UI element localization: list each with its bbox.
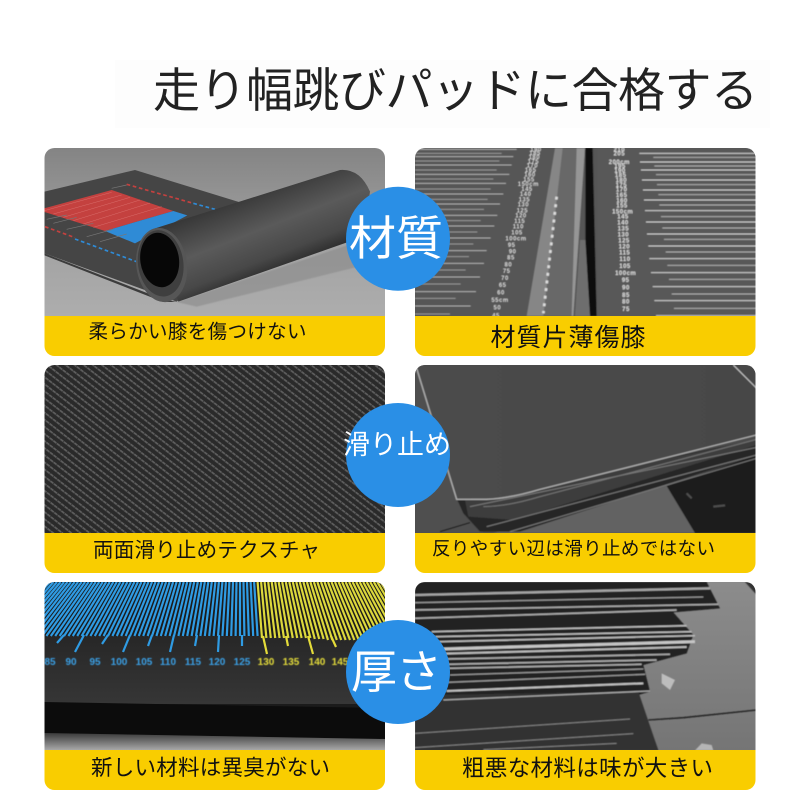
- blue scale lines: [44, 582, 259, 637]
- photo: printed ruler mat: 175: [616, 183, 627, 189]
- photo: printed ruler mat: 185: [529, 151, 541, 157]
- photo: printed ruler mat: 170: [527, 164, 538, 170]
- photo: printed ruler mat: 130: [618, 232, 629, 238]
- title: 走り幅跳びパッドに合格する: [153, 64, 758, 117]
- photo: printed ruler mat: 95: [508, 243, 516, 249]
- photo: printed ruler mat: 135: [519, 197, 530, 203]
- photo: printed ruler mat: 105: [619, 264, 631, 270]
- scale numbers: 105: [136, 657, 153, 668]
- photo: diagonal texture: [44, 365, 385, 533]
- photo: printed ruler mat: 170: [616, 188, 628, 194]
- photo: printed ruler mat: 115: [619, 251, 630, 257]
- photo: rough stacked sheets: [415, 582, 757, 750]
- badge: material: 材質: [349, 212, 443, 265]
- photo: printed ruler mat: 100cm: [615, 271, 636, 277]
- photo: printed ruler mat: 160: [616, 198, 628, 204]
- photo: printed ruler mat: 165: [525, 168, 537, 174]
- photo: printed ruler mat: 145: [617, 215, 629, 221]
- photo: printed ruler mat: 60: [497, 290, 505, 296]
- caption bar: [44, 750, 385, 790]
- badge: anti-slip: 滑り止め: [343, 430, 451, 460]
- photo: printed ruler mat: 190: [530, 147, 542, 153]
- panel: coarse material stack: [415, 582, 757, 790]
- caption: 粗悪な材料は味が大きい: [462, 756, 713, 781]
- photo: printed ruler mat: 190: [614, 168, 626, 174]
- caption bar: [44, 316, 385, 356]
- scale numbers: [44, 657, 348, 666]
- scale numbers: 120: [209, 657, 226, 668]
- photo: printed ruler mat: 120: [515, 214, 527, 220]
- panel: warped sheets without grip: [415, 365, 757, 573]
- photo: printed ruler mat: 180: [529, 155, 540, 161]
- photo: printed ruler mat: 75: [622, 307, 630, 313]
- badge: material: [346, 187, 450, 291]
- photo: printed ruler mat: 80: [622, 299, 630, 305]
- panel: new material, thickness close-up: [44, 582, 385, 790]
- scale numbers: 90: [65, 657, 77, 668]
- photo: printed ruler mat: 75: [503, 269, 511, 275]
- caption: 柔らかい膝を傷つけない: [88, 321, 306, 343]
- badge: thickness: [346, 620, 450, 724]
- photo: stacked thin sheets: [415, 365, 757, 533]
- photo: printed ruler mat: 80: [504, 262, 512, 268]
- photo: printed ruler mat: 100cm: [505, 237, 527, 243]
- photo: printed ruler mat: 105: [511, 231, 523, 237]
- scale numbers: 140: [309, 657, 326, 668]
- photo: printed ruler mat: 175: [528, 159, 539, 165]
- scale numbers: 115: [185, 657, 202, 668]
- photo: printed ruler mat: 85: [622, 293, 630, 299]
- photo: printed ruler mat: 200cm: [609, 160, 630, 166]
- caption bar: [44, 533, 385, 573]
- scale numbers: 130: [258, 657, 275, 668]
- caption: 両面滑り止めテクスチャ: [93, 539, 320, 562]
- scale numbers: 110: [160, 657, 177, 668]
- photo: printed ruler mat: 90: [622, 286, 630, 292]
- panel: double-sided anti-slip texture: [44, 365, 385, 573]
- caption: 材質片薄傷膝: [490, 324, 646, 352]
- title background: [115, 60, 770, 128]
- scale numbers: 135: [283, 657, 300, 668]
- photo: printed ruler mat: 95: [622, 278, 630, 284]
- photo: printed ruler mat: 110: [619, 257, 631, 263]
- photo: printed ruler mat: 210: [614, 147, 625, 153]
- caption bar: [415, 750, 756, 790]
- photo: printed ruler mat: 125: [517, 208, 528, 214]
- photo: printed ruler mat: 160: [524, 173, 536, 179]
- scale numbers: 145: [332, 657, 349, 668]
- photo: printed ruler mat: 150cm: [518, 182, 539, 188]
- photo: printed ruler mat: 50: [493, 306, 501, 312]
- photo: mat surface below scale: [44, 636, 385, 704]
- photo: printed ruler mat: 185: [615, 173, 627, 179]
- panel: thin material ruler mat: [415, 147, 757, 356]
- badge: thickness: 厚さ: [351, 646, 442, 698]
- caption: 新しい材料は異臭がない: [91, 756, 330, 780]
- photo: printed ruler mat: [415, 147, 757, 320]
- photo: printed ruler mat: 115: [514, 219, 525, 225]
- photo: printed ruler mat: 140: [617, 220, 629, 226]
- scale numbers: 100: [111, 657, 128, 668]
- scale numbers: 85: [44, 657, 56, 668]
- photo: printed ruler mat: 125: [618, 238, 630, 244]
- caption bar: [415, 533, 756, 573]
- photo: printed ruler mat: 45: [492, 314, 500, 320]
- photo: printed ruler mat: 150cm: [612, 209, 633, 215]
- scale numbers: 125: [234, 657, 251, 668]
- photo: printed ruler mat: 85: [507, 256, 515, 262]
- photo: printed ruler mat: 155: [616, 204, 628, 210]
- photo: printed ruler mat: 145: [521, 187, 533, 193]
- mat edge thickness: [44, 702, 385, 739]
- photo: printed ruler mat: 65: [499, 283, 507, 289]
- photo: printed ruler mat: 110: [513, 225, 524, 231]
- photo: printed ruler mat: 90: [509, 249, 517, 255]
- photo: printed ruler mat: 155: [523, 177, 535, 183]
- caption: 反りやすい辺は滑り止めではない: [432, 538, 715, 559]
- photo: printed ruler mat: 140: [520, 192, 532, 198]
- photo: printed ruler mat: 180: [616, 178, 627, 184]
- photo: printed ruler mat: 135: [618, 226, 629, 232]
- long ticks: [57, 635, 242, 652]
- photo: printed ruler mat: 205: [614, 152, 625, 158]
- badge: anti-slip: [343, 403, 451, 507]
- photo: printed ruler mat: 70: [501, 276, 509, 282]
- photo: printed ruler mat: 130: [518, 203, 529, 209]
- caption bar: [415, 316, 756, 356]
- floor reflection: [44, 733, 385, 750]
- photo: printed ruler mat: 195: [614, 164, 626, 170]
- photo: rolled mat: [44, 170, 385, 307]
- photo: printed ruler mat: 55cm: [491, 298, 509, 304]
- panel: soft rolled mat: [44, 148, 385, 356]
- yellow scale lines: [256, 582, 385, 640]
- photo: printed ruler mat: 165: [616, 193, 628, 199]
- scale numbers: 95: [89, 657, 101, 668]
- photo: printed ruler mat: 120: [619, 244, 630, 250]
